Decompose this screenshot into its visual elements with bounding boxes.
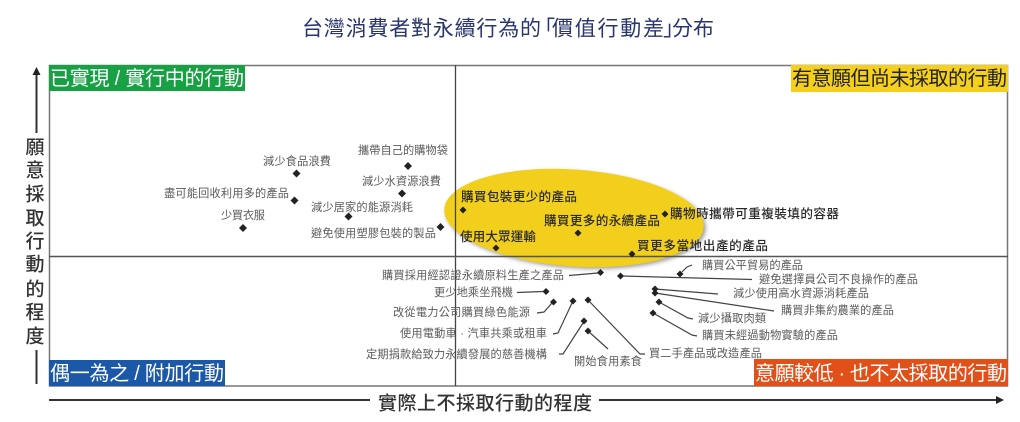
highlighted ellipse bbox=[441, 161, 709, 277]
data point: bring own bag: 攜帶自己的購物袋 bbox=[358, 143, 448, 157]
data point: fly less: 更少地乘坐飛機 bbox=[434, 285, 513, 299]
data point: public transport: 使用大眾運輸 bbox=[460, 229, 536, 244]
data point: fair trade bbox=[676, 258, 803, 278]
data point: charity donations bbox=[366, 318, 588, 361]
y axis: 行 bbox=[25, 230, 45, 252]
data point: fly less bbox=[434, 285, 550, 299]
data point: low water products: 減少使用高水資源消耗產品 bbox=[733, 286, 869, 300]
y axis: 取 bbox=[25, 208, 45, 230]
x axis bbox=[49, 392, 1004, 414]
data point: second-hand products: 買二手產品或改造產品 bbox=[649, 346, 762, 360]
data point: more sustainable products bbox=[544, 213, 660, 236]
data point: more sustainable products: 購買更多的永續產品 bbox=[544, 213, 660, 228]
data point: start vegetarian food bbox=[574, 328, 642, 368]
data point: buy less clothing bbox=[221, 208, 265, 232]
data point: reduce meat bbox=[656, 298, 766, 325]
data point: reduce water waste: 減少水資源浪費 bbox=[362, 174, 441, 188]
data point: reduce food waste bbox=[263, 154, 331, 178]
data point: green energy bbox=[393, 298, 557, 319]
y axis: 採 bbox=[25, 184, 45, 206]
data point: certified raw materials: 購買採用經認證永續原料生產之產品 bbox=[382, 268, 564, 282]
data point: avoid plastic packaging: 避免使用塑膠包裝的製品 bbox=[311, 226, 436, 240]
data point: local products bbox=[628, 238, 768, 258]
title: 分布 bbox=[672, 18, 714, 40]
title: 台灣消費者對永續行為的 bbox=[302, 18, 541, 40]
quadrant label: occasional: 偶一為之 / 附加行動 bbox=[50, 362, 224, 385]
data point: electric car sharing: 使用電動車 · 汽車共乘或租車 bbox=[400, 326, 547, 340]
title: 「 bbox=[534, 18, 555, 40]
data point: start vegetarian food: 開始食用素食 bbox=[574, 354, 642, 368]
data point: electric car sharing bbox=[400, 298, 576, 340]
y axis: 動 bbox=[25, 254, 45, 276]
title: 」 bbox=[663, 18, 684, 40]
data point: reduce home energy: 減少居家的能源消耗 bbox=[311, 200, 413, 214]
quadrant label: low willingness: 意願較低 · 也不太採取的行動 bbox=[755, 362, 1007, 385]
data point: cruelty free: 購買未經過動物實驗的產品 bbox=[702, 328, 838, 342]
data point: second-hand products bbox=[584, 296, 762, 360]
data point: avoid bad employers bbox=[617, 272, 918, 286]
chart frame and quadrant lines bbox=[49, 65, 1008, 386]
data point: local products: 買更多當地出產的產品 bbox=[637, 238, 768, 253]
data point: reduce food waste: 減少食品浪費 bbox=[263, 154, 331, 168]
y axis: 的 bbox=[25, 278, 45, 300]
data point: less packaging: 購買包裝更少的產品 bbox=[461, 189, 577, 204]
data point: reduce home energy bbox=[311, 200, 413, 220]
data point: avoid plastic packaging bbox=[311, 223, 444, 240]
data point: non-intensive agriculture bbox=[652, 290, 894, 317]
y axis: 願 bbox=[25, 138, 45, 158]
data point: recycle bbox=[164, 186, 298, 204]
data point: less packaging bbox=[460, 189, 577, 214]
data point: refillable containers: 購物時攜帶可重複裝填的容器 bbox=[670, 206, 839, 221]
data point: cruelty free bbox=[650, 310, 838, 342]
data point: buy less clothing: 少買衣服 bbox=[221, 208, 265, 222]
data point: reduce meat: 減少攝取肉類 bbox=[698, 311, 766, 325]
y axis: 程 bbox=[25, 302, 45, 324]
data point: avoid bad employers: 避免選擇員公司不良操作的產品 bbox=[759, 272, 918, 286]
data point: charity donations: 定期捐款給致力永續發展的慈善機構 bbox=[366, 347, 547, 361]
data point: recycle: 盡可能回收利用多的產品 bbox=[164, 186, 289, 200]
data point: public transport bbox=[460, 229, 536, 252]
data point: low water products bbox=[652, 286, 869, 300]
quadrant label: willing but not yet: 有意願但尚未採取的行動 bbox=[792, 67, 1007, 90]
y axis: 度 bbox=[25, 326, 45, 348]
data point: bring own bag bbox=[358, 143, 448, 170]
y axis: 意 bbox=[25, 160, 45, 182]
title: 價值行動差 bbox=[552, 18, 664, 40]
y axis bbox=[25, 67, 45, 384]
x axis: 實際上不採取行動的程度 bbox=[378, 392, 592, 414]
data point: green energy: 改從電力公司購買綠色能源 bbox=[393, 305, 530, 319]
data point: fair trade: 購買公平貿易的產品 bbox=[702, 258, 803, 272]
data point: reduce water waste bbox=[362, 174, 441, 198]
title bbox=[302, 18, 714, 40]
data point: non-intensive agriculture: 購買非集約農業的產品 bbox=[781, 303, 894, 317]
quadrant label: achieved: 已實現 / 實行中的行動 bbox=[50, 67, 244, 90]
